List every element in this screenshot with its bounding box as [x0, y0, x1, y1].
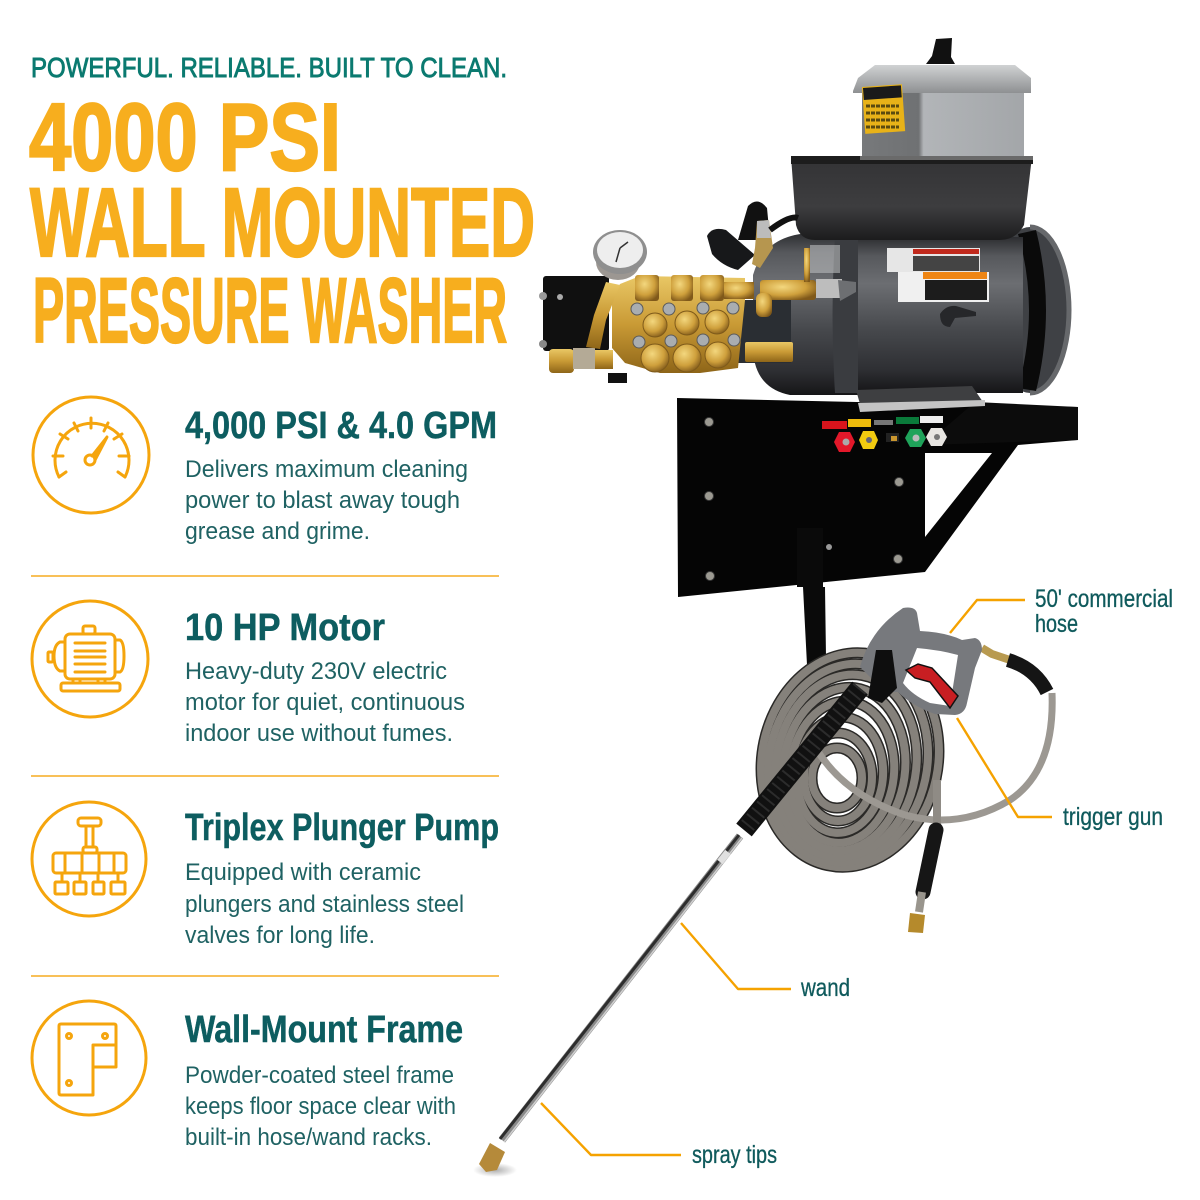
callout: commercial hose: [950, 585, 1173, 638]
feature: pump: [32, 802, 499, 949]
tagline: POWERFUL. RELIABLE. BUILT TO CLEAN.: [31, 52, 507, 83]
description: power to blast away tough: [185, 487, 460, 514]
callout: trigger gun: trigger gun: [1063, 803, 1163, 831]
title: [29, 84, 535, 362]
pressure gauge: [593, 230, 647, 280]
red trigger: [906, 664, 958, 708]
feature: frame: [32, 1001, 463, 1151]
nozzle tip: [479, 1143, 505, 1172]
description: [185, 1062, 456, 1151]
title: WALL MOUNTED: [30, 168, 535, 277]
feature: pressure and flow: [33, 397, 497, 545]
gauge riser: [586, 282, 620, 349]
wand insulated grip: [744, 688, 860, 830]
callout: commercial hose: hose: [1035, 610, 1078, 638]
callout: wand: [681, 923, 850, 1002]
heading: Wall-Mount Frame: [185, 1009, 463, 1051]
description: valves for long life.: [185, 922, 375, 949]
triplex pump: [539, 230, 856, 383]
wand: [473, 835, 742, 1177]
title: PRESSURE WASHER: [33, 260, 507, 362]
hose end fitting: [908, 780, 937, 933]
callout: trigger gun: [957, 718, 1163, 831]
pump bolts: [631, 302, 740, 348]
spray tips: [834, 428, 947, 452]
heading: 10 HP Motor: [185, 607, 385, 649]
switch box: [853, 38, 1031, 156]
hose coil: [741, 636, 959, 884]
description: keeps floor space clear with: [185, 1093, 456, 1120]
description: Powder-coated steel frame: [185, 1062, 454, 1089]
description: built-in hose/wand racks.: [185, 1124, 432, 1151]
caution label: [862, 84, 905, 134]
description: [185, 859, 464, 949]
warning labels: [887, 248, 989, 302]
title: 4000 PSI: [29, 84, 341, 191]
description: Equipped with ceramic: [185, 859, 421, 886]
pump bosses: [641, 310, 731, 372]
colour labels: [822, 416, 943, 429]
feature: motor: [32, 601, 465, 747]
drain plug: [940, 306, 976, 327]
icon: pump: [32, 802, 146, 916]
icon: motor: [32, 601, 148, 717]
description: Delivers maximum cleaning: [185, 456, 468, 483]
trigger gun: [860, 608, 1047, 715]
electric motor: [729, 227, 1069, 412]
knob: [926, 38, 955, 64]
description: indoor use without fumes.: [185, 720, 453, 747]
callout: spray tips: [541, 1103, 777, 1169]
description: [185, 456, 468, 545]
icon: wall-mount frame: [32, 1001, 146, 1115]
heading: Triplex Plunger Pump: [185, 807, 499, 849]
top manifold: [635, 248, 816, 317]
description: motor for quiet, continuous: [185, 689, 465, 716]
whip hose: [817, 693, 1052, 820]
side fittings: [549, 279, 856, 373]
description: plungers and stainless steel: [185, 891, 464, 918]
capacitor box: [791, 156, 1033, 240]
bolts: [704, 418, 904, 580]
description: Heavy-duty 230V electric: [185, 658, 447, 685]
icon: gauge: [33, 397, 149, 513]
crank case: [543, 276, 609, 351]
unloader handles: [707, 201, 798, 270]
brass head: [612, 276, 745, 373]
description: [185, 658, 465, 747]
wand coupling: [868, 650, 897, 703]
callout: spray tips: spray tips: [692, 1141, 777, 1169]
motor foot: [856, 386, 985, 411]
description: grease and grime.: [185, 518, 370, 545]
wall mount bracket: [677, 398, 1078, 665]
heading: 4,000 PSI & 4.0 GPM: [185, 405, 497, 447]
callout: wand: wand: [800, 974, 850, 1002]
hose hanger: [797, 528, 826, 665]
callout: commercial hose: 50' commercial: [1035, 585, 1173, 613]
